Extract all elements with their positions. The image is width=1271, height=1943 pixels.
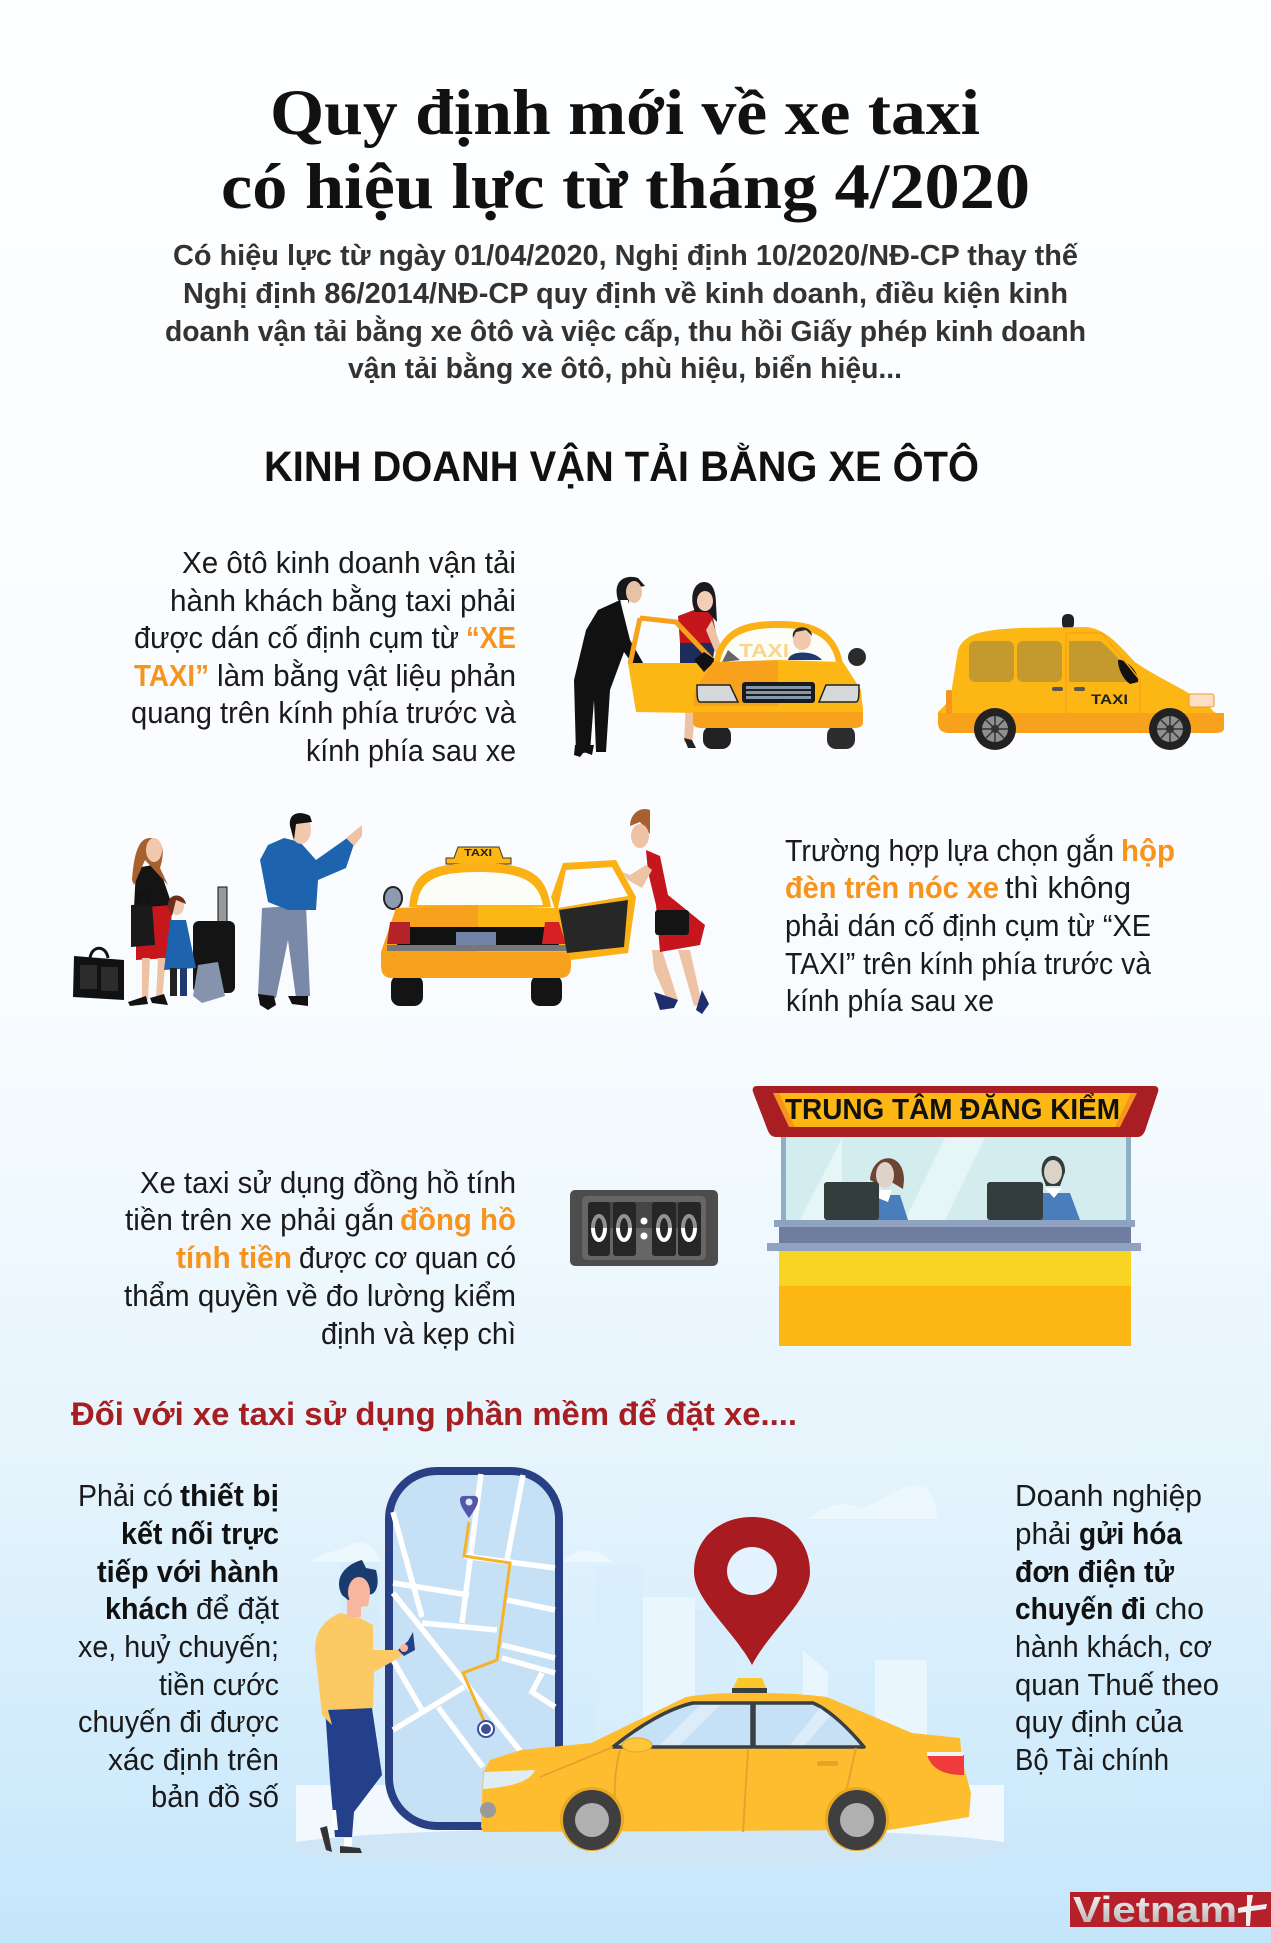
- child: [164, 895, 196, 996]
- open car door: [628, 618, 716, 713]
- big map pin: [694, 1517, 810, 1665]
- kiosk sign: [753, 1086, 1158, 1137]
- title: có hiệu lực từ tháng 4/2020: [221, 151, 1030, 223]
- text block: taxi sticker rule: kính phía sau xe: [306, 733, 516, 768]
- intro text: [165, 240, 1086, 385]
- text block: taxi sticker rule: quang trên kính phía trước và: [131, 695, 517, 730]
- city backdrop: [280, 1486, 1020, 1868]
- phone with map: [389, 1471, 559, 1826]
- text block: taxi sticker rule: Xe ôtô kinh doanh vận tải: [182, 545, 516, 580]
- man in blue jacket: [258, 813, 362, 1010]
- icon: taximeter display: [570, 1190, 718, 1266]
- text block: connection device rule: tiếp với hành: [97, 1554, 279, 1589]
- text block: taximeter rule: Xe taxi sử dụng đồng hồ tính: [140, 1165, 516, 1200]
- illustration: inspection centre kiosk: [753, 1086, 1158, 1346]
- suitcase: [193, 887, 235, 993]
- text block: taxi sticker rule: TAXI”: [134, 658, 209, 693]
- text block: e-invoice rule: gửi hóa: [1079, 1516, 1183, 1551]
- text block: e-invoice rule: hành khách, cơ: [1015, 1629, 1212, 1664]
- clerk two: [987, 1156, 1080, 1220]
- text block: taxi sticker rule: [131, 545, 517, 768]
- text block: roof box rule: hộp: [1121, 833, 1175, 868]
- intro text: Nghị định 86/2014/NĐ-CP quy định về kinh doanh, điều kiện kinh: [183, 278, 1068, 310]
- illustration: man opening taxi door for woman: [574, 577, 866, 757]
- man in black suit: [574, 577, 652, 757]
- text block: roof box rule: [785, 833, 1175, 1018]
- open rear door: [551, 860, 636, 960]
- car windows: [613, 1703, 864, 1747]
- illustration: side view taxi: [938, 614, 1224, 750]
- text block: connection device rule: chuyến đi được: [78, 1704, 279, 1739]
- end dot: [478, 1721, 494, 1737]
- text block: taximeter rule: tiền trên xe phải gắn: [125, 1202, 394, 1237]
- text block: connection device rule: để đặt: [196, 1591, 279, 1626]
- text block: taxi sticker rule: “XE: [466, 620, 516, 655]
- rear taxi: [381, 847, 571, 1006]
- text block: e-invoice rule: quy định của: [1015, 1704, 1184, 1739]
- text block: connection device rule: khách: [105, 1591, 188, 1626]
- route line: [463, 1522, 510, 1723]
- section heading: KINH DOANH VẬN TẢI BẰNG XE ÔTÔ: [264, 442, 979, 491]
- intro text: doanh vận tải bằng xe ôtô và việc cấp, thu hồi Giấy phép kinh doanh: [165, 314, 1086, 348]
- shopping bag: [193, 962, 225, 1003]
- travel bag: [73, 948, 124, 1000]
- text block: e-invoice rule: chuyến đi: [1015, 1591, 1146, 1626]
- intro text: Có hiệu lực từ ngày 01/04/2020, Nghị định 10/2020/NĐ-CP thay thế: [173, 240, 1079, 272]
- glass booth: [781, 1137, 1131, 1221]
- text block: e-invoice rule: cho: [1155, 1591, 1204, 1626]
- text block: connection device rule: kết nối trực: [121, 1516, 279, 1551]
- windshield taxi label: TAXI: [739, 641, 789, 661]
- text block: e-invoice rule: đơn điện tử: [1015, 1554, 1174, 1589]
- illustration: side view taxi: TAXI: [1091, 691, 1128, 707]
- taxi wheels: [560, 1787, 889, 1851]
- text block: taximeter rule: tính tiền: [176, 1240, 292, 1275]
- text block: connection device rule: Phải có: [78, 1478, 173, 1513]
- logo: Vietnam+: [1070, 1889, 1271, 1930]
- counter: [767, 1220, 1141, 1346]
- text block: e-invoice rule: [1015, 1478, 1219, 1777]
- intro text: vận tải bằng xe ôtô, phù hiệu, biển hiệu...: [348, 351, 902, 385]
- text block: taximeter rule: thẩm quyền về đo lường kiểm: [124, 1278, 516, 1313]
- text block: roof box rule: Trường hợp lựa chọn gắn: [785, 833, 1114, 868]
- text block: connection device rule: [78, 1478, 279, 1814]
- woman: [128, 838, 172, 1006]
- text block: roof box rule: thì không: [1005, 870, 1131, 905]
- text block: roof box rule: TAXI” trên kính phía trước và: [785, 946, 1152, 981]
- woman in red dress: [622, 809, 709, 1014]
- text block: e-invoice rule: quan Thuế theo: [1015, 1667, 1219, 1702]
- clerk one: [824, 1158, 908, 1220]
- text block: e-invoice rule: phải: [1015, 1516, 1071, 1551]
- subheading: app-based taxi: Đối với xe taxi sử dụng phần mềm để đặt xe....: [71, 1396, 797, 1432]
- yellow taxi: [480, 1678, 971, 1851]
- text block: connection device rule: tiền cước: [159, 1667, 279, 1702]
- text block: connection device rule: bản đồ số: [151, 1779, 279, 1814]
- text block: e-invoice rule: Bộ Tài chính: [1015, 1742, 1169, 1777]
- text block: taxi sticker rule: hành khách bằng taxi phải: [170, 583, 516, 618]
- title: Quy định mới về xe taxi: [270, 77, 980, 149]
- text block: taximeter rule: [124, 1165, 516, 1351]
- man with phone: [315, 1560, 415, 1853]
- illustration: family with luggage and man hailing taxi: [73, 809, 709, 1014]
- text block: taximeter rule: được cơ quan có: [299, 1240, 516, 1275]
- kiosk sign: TRUNG TÂM ĐĂNG KIỂM: [785, 1092, 1120, 1126]
- woman passenger: [678, 582, 722, 748]
- rear taxi: TAXI: [464, 848, 492, 859]
- map roads: [393, 1474, 555, 1767]
- text block: taxi sticker rule: làm bằng vật liệu phản: [217, 658, 516, 693]
- text block: taximeter rule: đồng hồ: [400, 1202, 516, 1237]
- title: [221, 77, 1030, 223]
- text block: connection device rule: xác định trên: [108, 1742, 279, 1777]
- text block: e-invoice rule: Doanh nghiệp: [1015, 1478, 1202, 1513]
- text block: taxi sticker rule: được dán cố định cụm từ: [134, 620, 459, 655]
- text block: connection device rule: thiết bị: [180, 1478, 279, 1513]
- text block: taximeter rule: định và kẹp chì: [321, 1316, 516, 1351]
- text block: roof box rule: phải dán cố định cụm từ “XE: [785, 908, 1151, 943]
- text block: connection device rule: xe, huỷ chuyến;: [78, 1629, 279, 1664]
- start pin: [460, 1496, 478, 1518]
- text block: roof box rule: đèn trên nóc xe: [785, 870, 999, 905]
- illustration: booking app scene: [280, 1471, 1020, 1868]
- logo: Vietnam+: Vietnam: [1073, 1889, 1237, 1930]
- driver: [788, 627, 822, 660]
- wheels: [974, 708, 1191, 750]
- front taxi: [693, 621, 866, 749]
- text block: roof box rule: kính phía sau xe: [786, 983, 994, 1018]
